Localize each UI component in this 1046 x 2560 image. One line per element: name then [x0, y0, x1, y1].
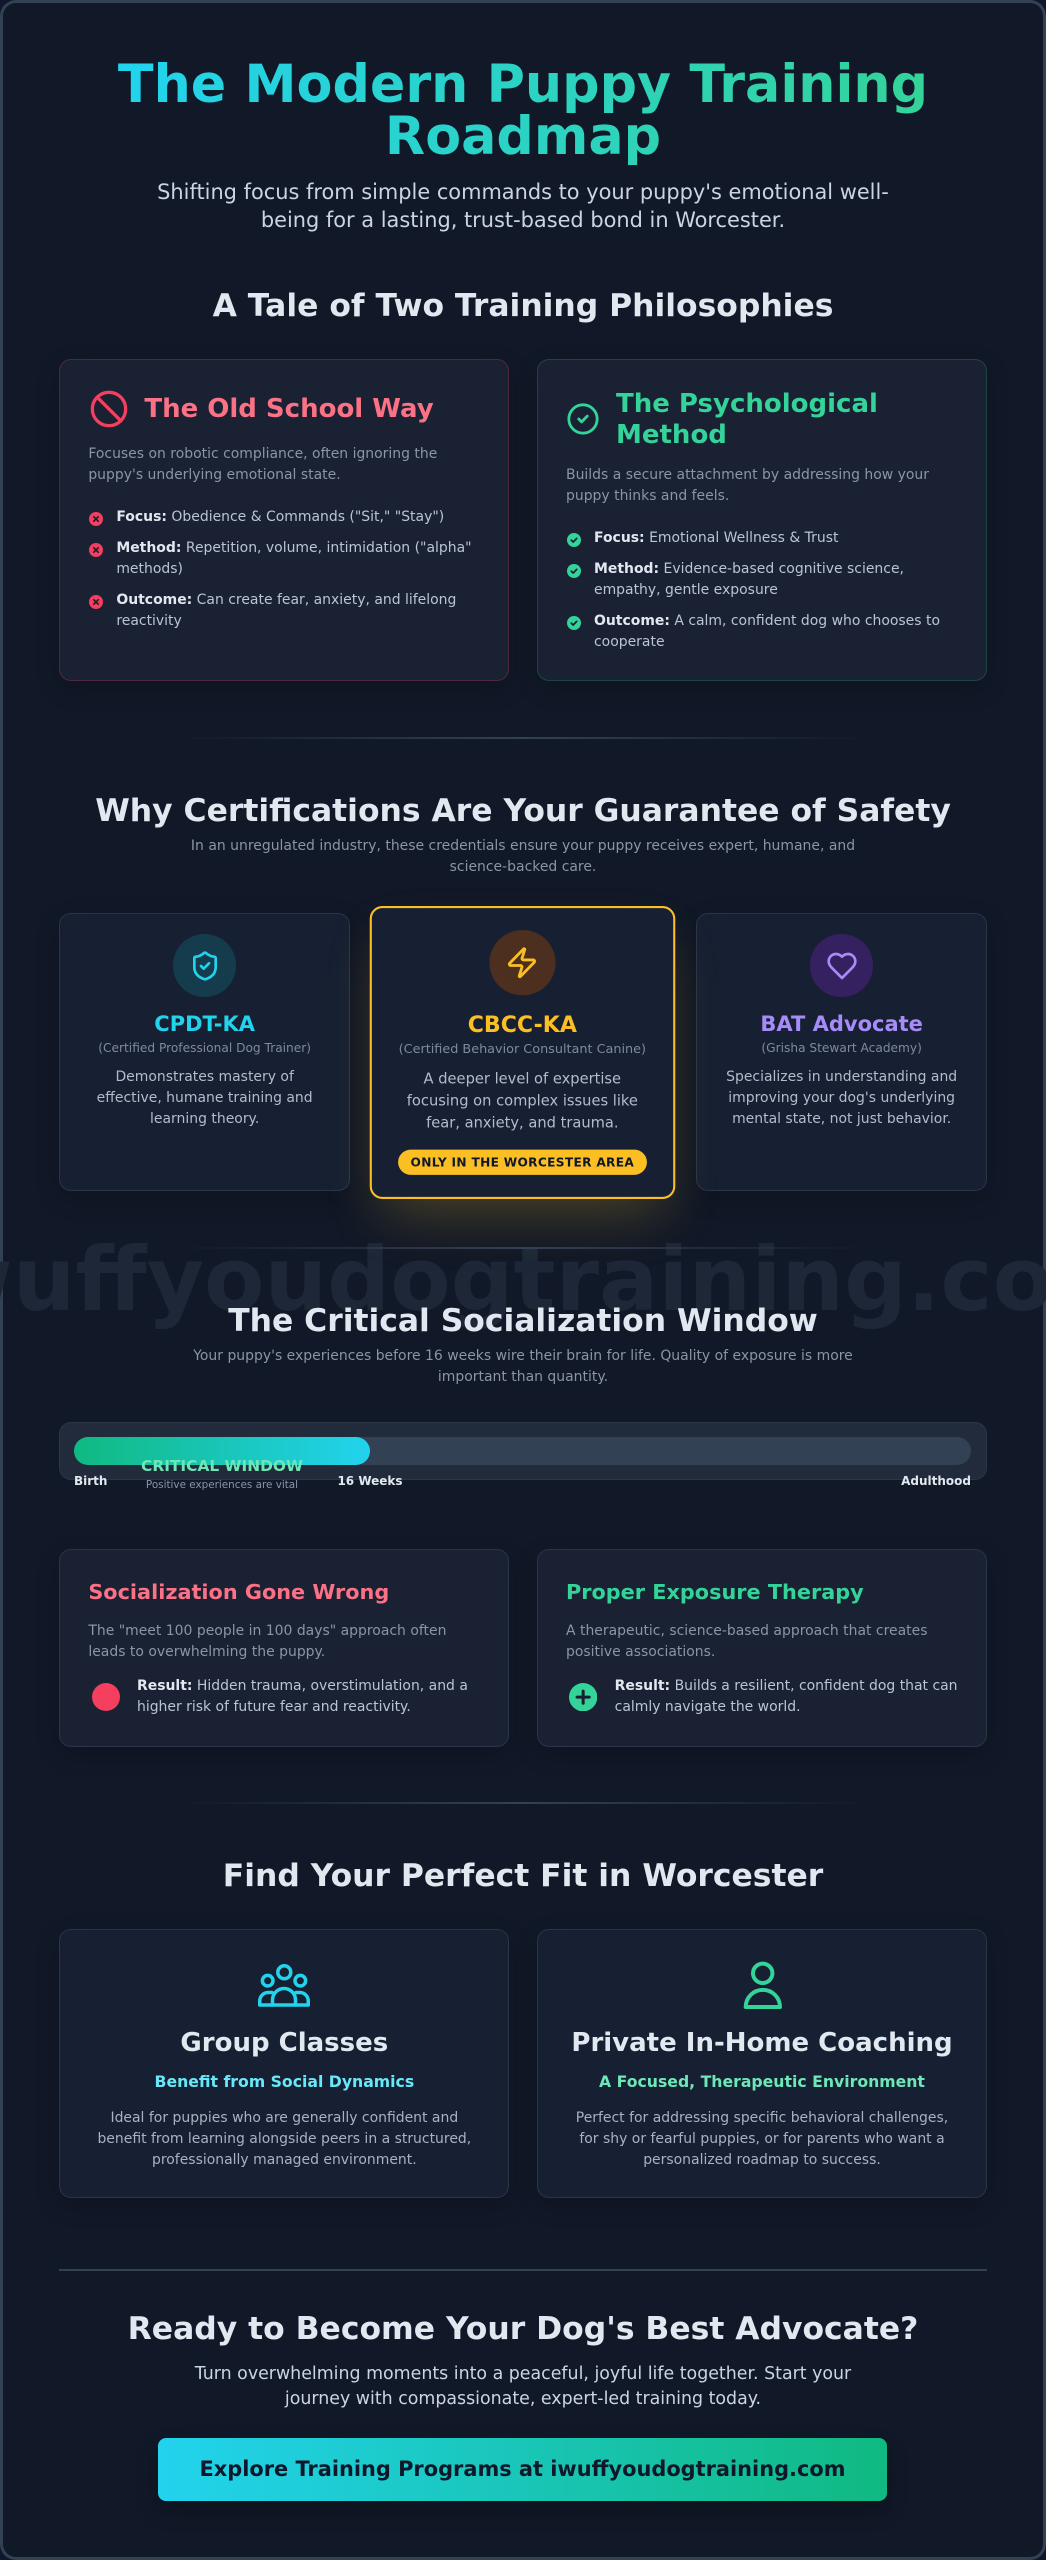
option benefit: Benefit from Social Dynamics: [154, 2072, 414, 2091]
description: Focuses on robotic compliance, often ignoring the: [88, 446, 437, 462]
description: Builds a secure attachment by addressing how your: [566, 467, 929, 483]
certification description: [726, 1069, 957, 1127]
list item: outcome: Outcome: A calm, confident dog who chooses to: [594, 613, 940, 629]
panel: CPDT-KA: [59, 913, 350, 1191]
panel heading: [616, 389, 878, 450]
certification name: CBCC-KA: [468, 1011, 577, 1037]
badge: only in the Worcester area: ONLY IN THE WORCESTER AREA: [411, 1154, 634, 1169]
description: A therapeutic, science-based approach that creates: [566, 1623, 928, 1639]
certification full name: (Grisha Stewart Academy): [761, 1041, 922, 1055]
option description: [576, 2110, 948, 2168]
icon: shield check: [173, 934, 236, 997]
icon: circle check: [567, 403, 599, 435]
option name: Private In-Home Coaching: [571, 2028, 953, 2058]
icon: ban: [90, 390, 128, 428]
description: [88, 1623, 446, 1660]
option description: personalized roadmap to success.: [643, 2152, 881, 2168]
call to action text: Turn overwhelming moments into a peaceful, joyful life together. Start your: [195, 2364, 851, 2384]
button: explore training programs: Explore Training Programs at iwuffyoudogtraining.com: [200, 2457, 845, 2481]
result text: Result: Hidden trauma, overstimulation, and a: [137, 1678, 468, 1694]
certification name: BAT Advocate: [760, 1012, 923, 1036]
option name: Group Classes: [180, 2028, 388, 2058]
heading: call to action: Ready to Become Your Dog's Best Advocate?: [128, 2311, 918, 2347]
list item: outcome: reactivity: [116, 613, 182, 629]
result text: [615, 1678, 958, 1715]
list item: outcome: Outcome: Can create fear, anxiety, and lifelong: [116, 592, 456, 608]
panel heading: The Old School Way: [144, 394, 434, 424]
section intro: certifications: In an unregulated industry, these credentials ensure your puppy receives expert, humane, and: [191, 838, 855, 854]
certification description: Specializes in understanding and: [726, 1069, 957, 1085]
section intro: certifications: science-backed care.: [450, 859, 596, 875]
list item: method: empathy, gentle exposure: [594, 582, 778, 598]
list item: outcome: [594, 613, 940, 650]
certification full name: (Certified Professional Dog Trainer): [98, 1041, 311, 1055]
result text: [137, 1678, 468, 1715]
panel heading: The Psychological: [616, 389, 878, 419]
panel: socialization gone wrong: [59, 1549, 509, 1747]
panel: the psychological method: [537, 359, 987, 681]
timeline panel: [59, 1422, 987, 1480]
list item: method: Method: Evidence-based cognitive science,: [594, 561, 904, 577]
description: positive associations.: [566, 1644, 715, 1660]
heading: certifications: Why Certifications Are Your Guarantee of Safety: [95, 793, 951, 829]
option description: [97, 2110, 471, 2168]
panel heading: Method: [616, 420, 727, 450]
caption: positive experiences: Positive experiences are vital: [146, 1479, 298, 1491]
certification description: fear, anxiety, and trauma.: [426, 1115, 619, 1131]
icon: plus circle: [569, 1683, 597, 1711]
result text: Result: Builds a resilient, confident dog that can: [615, 1678, 958, 1694]
call to action text: [194, 2364, 852, 2408]
icon: x bullet: [89, 543, 103, 557]
section intro: socialization: Your puppy's experiences before 16 weeks wire their brain for life. Quality of exposure is more: [193, 1348, 853, 1364]
certification description: effective, humane training and: [97, 1090, 313, 1106]
description: puppy's underlying emotional state.: [88, 467, 341, 483]
certification full name: (Certified Behavior Consultant Canine): [399, 1041, 646, 1056]
option description: Ideal for puppies who are generally confident and: [110, 2110, 458, 2126]
list item: method: [116, 540, 472, 577]
label: 16 weeks: 16 Weeks: [337, 1474, 403, 1488]
certification description: mental state, not just behavior.: [732, 1111, 951, 1127]
heading: philosophies: A Tale of Two Training Philosophies: [213, 288, 833, 324]
icon: group of people: [258, 1964, 310, 2007]
panel heading: Proper Exposure Therapy: [566, 1580, 864, 1604]
icon: check bullet: [567, 616, 581, 630]
icon: check bullet: [567, 533, 581, 547]
certification description: Demonstrates mastery of: [115, 1069, 294, 1085]
certification description: focusing on complex issues like: [407, 1093, 638, 1109]
list item: outcome: cooperate: [594, 634, 665, 650]
description: [566, 1623, 928, 1660]
panel: proper exposure therapy: [537, 1549, 987, 1747]
icon: check bullet: [567, 564, 581, 578]
timeline fill: critical window: [74, 1437, 370, 1465]
section intro: socialization: [193, 1348, 853, 1385]
panel: the old school way: [59, 359, 509, 681]
description: puppy thinks and feels.: [566, 488, 729, 504]
panel heading: Socialization Gone Wrong: [88, 1580, 389, 1604]
badge: only in the Worcester area: [398, 1149, 647, 1175]
option description: professionally managed environment.: [152, 2152, 417, 2168]
certification description: learning theory.: [150, 1111, 259, 1127]
timeline chart: [59, 1422, 987, 1491]
option description: Perfect for addressing specific behavioral challenges,: [576, 2110, 948, 2126]
title: The Modern Puppy Training: [118, 54, 928, 115]
icon: x bullet: [89, 512, 103, 526]
subtitle: being for a lasting, trust-based bond in Worcester.: [261, 208, 785, 232]
panel: BAT Advocate: [696, 913, 987, 1191]
description: The "meet 100 people in 100 days" approach often: [88, 1623, 446, 1639]
call to action text: journey with compassionate, expert-led training today.: [285, 2388, 761, 2408]
certification description: [407, 1071, 638, 1131]
list item: focus: Focus: Obedience & Commands ("Sit," "Stay"): [116, 509, 444, 525]
section intro: certifications: [191, 838, 855, 875]
result text: calmly navigate the world.: [615, 1699, 801, 1715]
description: leads to overwhelming the puppy.: [88, 1644, 325, 1660]
subtitle: [157, 180, 889, 232]
label: adulthood: Adulthood: [901, 1474, 971, 1488]
timeline track: [74, 1437, 971, 1465]
icon: heart: [810, 934, 873, 997]
icon: x bullet: [89, 595, 103, 609]
description: [566, 467, 929, 504]
button: explore training programs: [158, 2438, 887, 2501]
section intro: socialization: important than quantity.: [438, 1369, 608, 1385]
label: critical window: CRITICAL WINDOW: [141, 1457, 303, 1475]
list item: outcome: [116, 592, 456, 629]
heading: socialization window: The Critical Socialization Window: [228, 1303, 818, 1339]
icon: lightning bolt: [490, 929, 555, 995]
option description: for shy or fearful puppies, or for parents who want a: [579, 2131, 945, 2147]
icon: person: [744, 1962, 782, 2009]
description: [88, 446, 437, 483]
title: [117, 59, 929, 165]
list item: method: [594, 561, 904, 598]
option benefit: A Focused, Therapeutic Environment: [599, 2072, 925, 2091]
panel: group classes: [59, 1929, 509, 2198]
heading: find your fit: Find Your Perfect Fit in Worcester: [223, 1858, 823, 1894]
panel: CBCC-KA featured: [370, 906, 675, 1198]
icon: red dot: [92, 1683, 120, 1711]
certification description: A deeper level of expertise: [424, 1071, 621, 1087]
result text: higher risk of future fear and reactivity.: [137, 1699, 411, 1715]
certification name: CPDT-KA: [154, 1012, 255, 1036]
panel: private in-home coaching: [537, 1929, 987, 2198]
list item: method: methods): [116, 561, 183, 577]
list item: focus: Focus: Emotional Wellness & Trust: [594, 530, 838, 546]
option description: benefit from learning alongside peers in a structured,: [97, 2131, 471, 2147]
subtitle: Shifting focus from simple commands to your puppy's emotional well-: [157, 180, 889, 204]
title: Roadmap: [385, 106, 661, 167]
label: birth: Birth: [74, 1474, 107, 1488]
certification description: improving your dog's underlying: [728, 1090, 955, 1106]
certification description: [97, 1069, 313, 1127]
list item: method: Method: Repetition, volume, intimidation ("alpha": [116, 540, 472, 556]
